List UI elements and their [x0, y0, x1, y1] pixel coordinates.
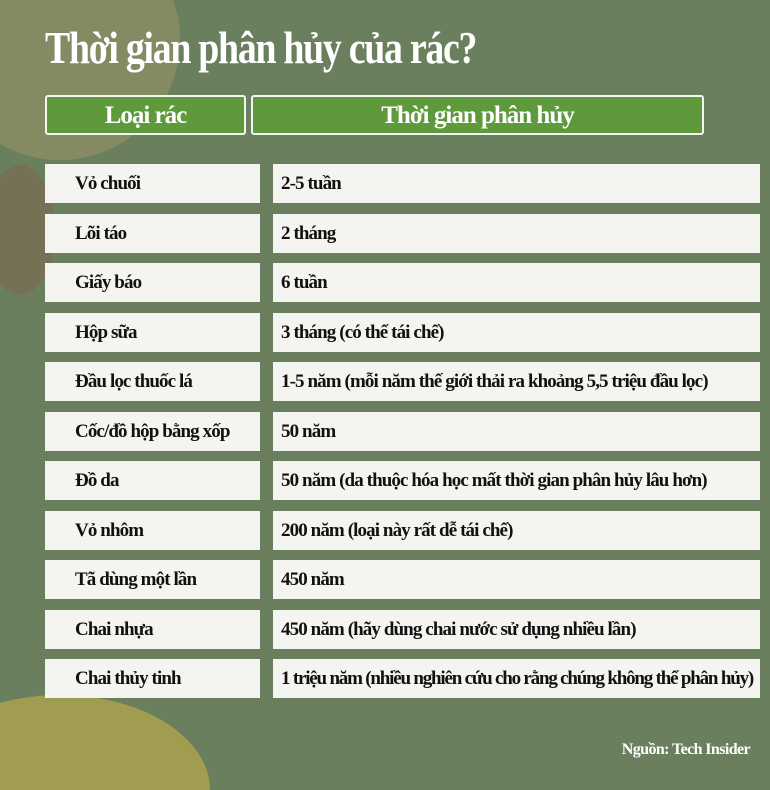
source: Nguồn: Tech Insider	[622, 741, 750, 758]
header: thời gian: Thời gian phân hủy	[381, 102, 574, 129]
table rows: 2-5 tuần	[281, 173, 341, 194]
table rows: Vỏ chuối	[75, 173, 140, 194]
table rows: 450 năm	[281, 569, 344, 590]
table rows: 6 tuần	[281, 272, 327, 293]
table rows	[45, 164, 760, 698]
table rows: Giấy báo	[75, 272, 141, 293]
table rows: Chai nhựa	[75, 618, 153, 640]
table rows: 2 tháng	[281, 222, 335, 244]
header: loại rác: Loại rác	[105, 102, 186, 129]
table rows: 1-5 năm (mỗi năm thế giới thải ra khoảng 5,5 triệu đầu lọc)	[281, 371, 708, 392]
table rows: 50 năm	[281, 420, 335, 442]
table rows: 1 triệu năm (nhiều nghiên cứu cho rằng chúng không thể phân hủy)	[281, 668, 753, 689]
table rows: Hộp sữa	[75, 322, 137, 342]
table rows: 50 năm (da thuộc hóa học mất thời gian phân hủy lâu hơn)	[281, 470, 707, 491]
table rows: 450 năm (hãy dùng chai nước sử dụng nhiều lần)	[281, 618, 636, 640]
table rows: Đồ da	[75, 470, 119, 491]
table rows: Chai thủy tinh	[75, 668, 181, 689]
table rows: Vỏ nhôm	[75, 520, 143, 540]
table rows: Lõi táo	[75, 222, 126, 244]
header: loại rác	[45, 95, 246, 135]
table rows: Tã dùng một lần	[75, 569, 196, 590]
title: Thời gian phân hủy của rác?	[45, 23, 476, 73]
table rows: Đầu lọc thuốc lá	[75, 371, 192, 392]
table rows: 200 năm (loại này rất dễ tái chế)	[281, 520, 513, 540]
header: thời gian	[251, 95, 704, 135]
table rows: 3 tháng (có thể tái chế)	[281, 322, 444, 342]
table rows: Cốc/đồ hộp bằng xốp	[75, 420, 230, 442]
